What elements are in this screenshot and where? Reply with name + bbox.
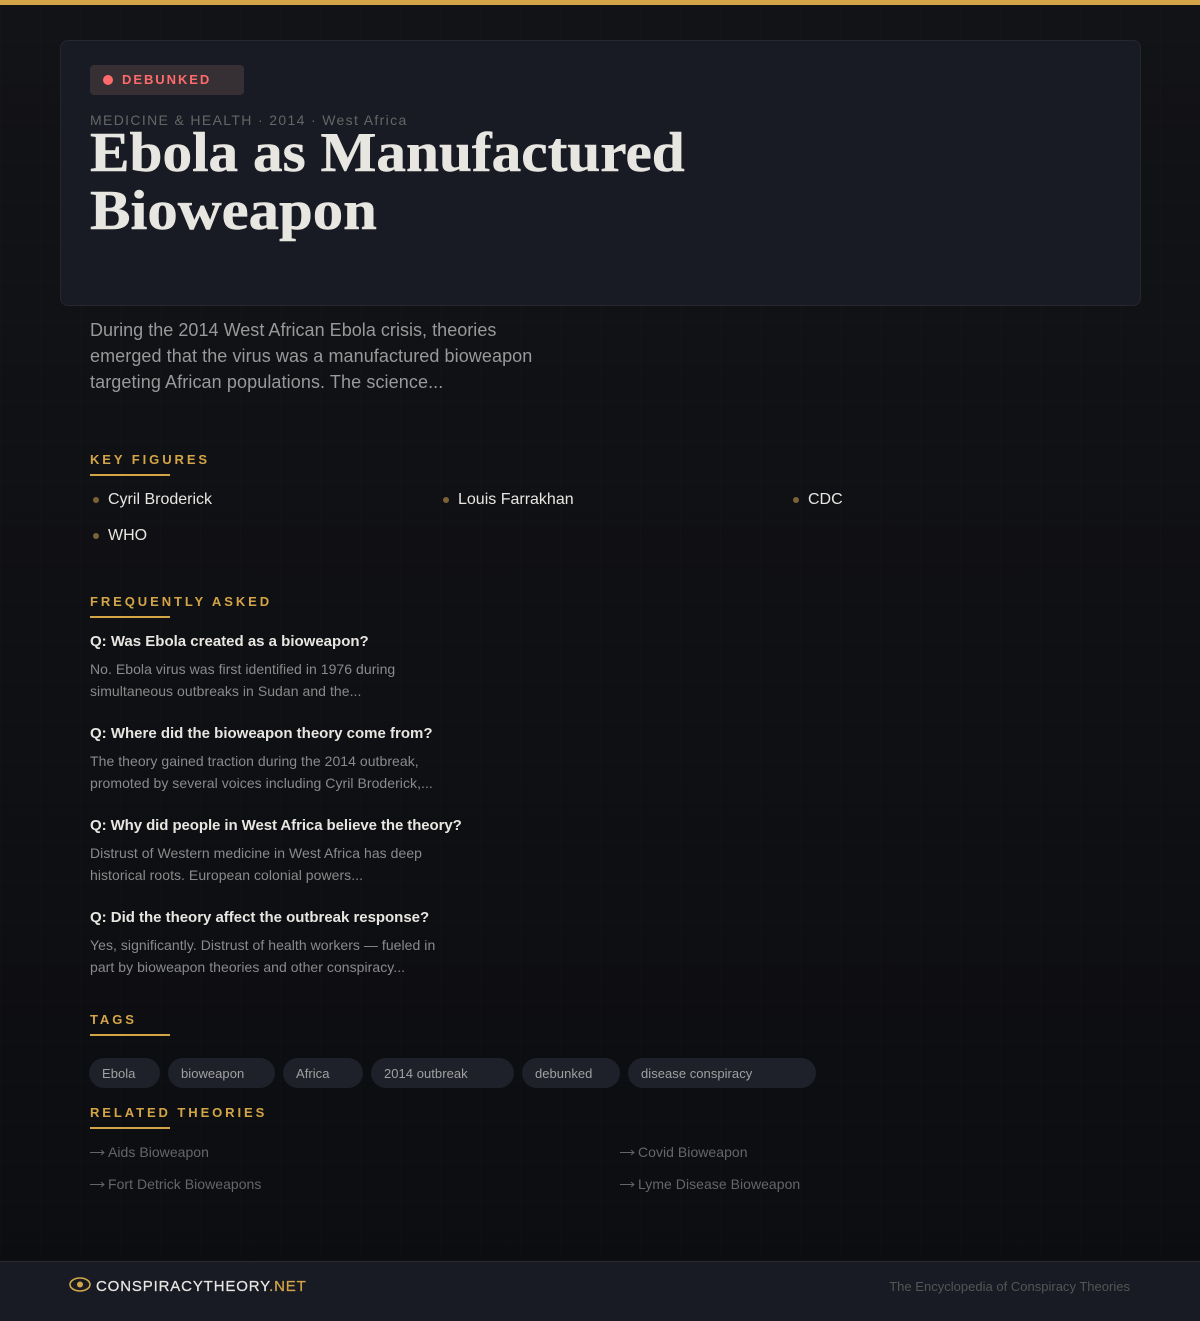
tag: 2014 outbreak: 2014 outbreak: [384, 1066, 468, 1081]
figure: WHO: WHO: [108, 527, 147, 544]
tag: Africa: Africa: [296, 1066, 329, 1081]
figure: CDC: CDC: [808, 491, 843, 508]
faq 1: No. Ebola virus was first identified in 1976 during: [90, 661, 395, 677]
related: Aids Bioweapon: Aids Bioweapon: [108, 1144, 209, 1160]
tag: disease conspiracy: disease conspiracy: [641, 1066, 752, 1081]
faq 3: Distrust of Western medicine in West Africa has deep: [90, 845, 422, 861]
tagline: The Encyclopedia of Conspiracy Theories: [889, 1279, 1130, 1294]
tag: bioweapon: bioweapon: [181, 1066, 244, 1081]
faq 3: [90, 817, 462, 883]
tag: Africa: [283, 1058, 363, 1088]
faq 4: Yes, significantly. Distrust of health workers — fueled in: [90, 937, 435, 953]
related: Covid Bioweapon: Covid Bioweapon: [638, 1144, 748, 1160]
faq 2: The theory gained traction during the 2014 outbreak,: [90, 753, 419, 769]
icon: eye logo: [69, 1277, 91, 1292]
figure: Louis Farrakhan: Louis Farrakhan: [458, 491, 574, 508]
heading: key figures: KEY FIGURES: [90, 452, 210, 467]
tag: bioweapon: [168, 1058, 275, 1088]
tag: 2014 outbreak: [371, 1058, 514, 1088]
related: Lyme Disease Bioweapon: Lyme Disease Bioweapon: [638, 1176, 800, 1192]
intro text: emerged that the virus was a manufactured bioweapon: [90, 346, 532, 366]
faq 1: [90, 633, 395, 699]
intro text: During the 2014 West African Ebola crisis, theories: [90, 320, 496, 340]
faq 3: historical roots. European colonial powers...: [90, 867, 363, 883]
badge label: DEBUNKED: [122, 72, 211, 87]
title: Bioweapon: [90, 180, 377, 242]
badge dot: [103, 75, 113, 85]
footer: [0, 1261, 1200, 1321]
category line: MEDICINE & HEALTH · 2014 · West Africa: [90, 112, 408, 128]
intro text: targeting African populations. The science...: [90, 372, 443, 392]
intro text: [90, 320, 532, 392]
faq 1: Q: Was Ebola created as a bioweapon?: [90, 633, 369, 650]
faq 2: [90, 725, 433, 791]
panel: hero header: [60, 40, 1140, 306]
faq 2: promoted by several voices including Cyril Broderick,...: [90, 775, 433, 791]
key figure list: [93, 491, 843, 544]
top accent bar: [0, 0, 1200, 5]
tag: Ebola: [89, 1058, 160, 1088]
faq 2: Q: Where did the bioweapon theory come from?: [90, 725, 433, 742]
faq 4: Q: Did the theory affect the outbreak response?: [90, 909, 429, 926]
related: Fort Detrick Bioweapons: Fort Detrick Bioweapons: [108, 1176, 261, 1192]
tag: debunked: debunked: [535, 1066, 592, 1081]
figure: CDC: [793, 491, 843, 508]
badge: debunked: [90, 65, 244, 95]
tag: Ebola: Ebola: [102, 1066, 135, 1081]
tag: debunked: [522, 1058, 620, 1088]
faq 3: Q: Why did people in West Africa believe the theory?: [90, 817, 462, 834]
faq 4: part by bioweapon theories and other conspiracy...: [90, 959, 405, 975]
logo wordmark: CONSPIRACYTHEORY.NET: [96, 1278, 307, 1295]
title: [90, 122, 685, 242]
heading: related theories: RELATED THEORIES: [90, 1105, 267, 1120]
heading: tags: TAGS: [90, 1012, 137, 1027]
tag: disease conspiracy: [628, 1058, 816, 1088]
figure: Cyril Broderick: Cyril Broderick: [108, 491, 212, 508]
heading: frequently asked: FREQUENTLY ASKED: [90, 594, 272, 609]
title: Ebola as Manufactured: [90, 122, 685, 184]
faq 1: simultaneous outbreaks in Sudan and the...: [90, 683, 361, 699]
faq 4: [90, 909, 435, 975]
